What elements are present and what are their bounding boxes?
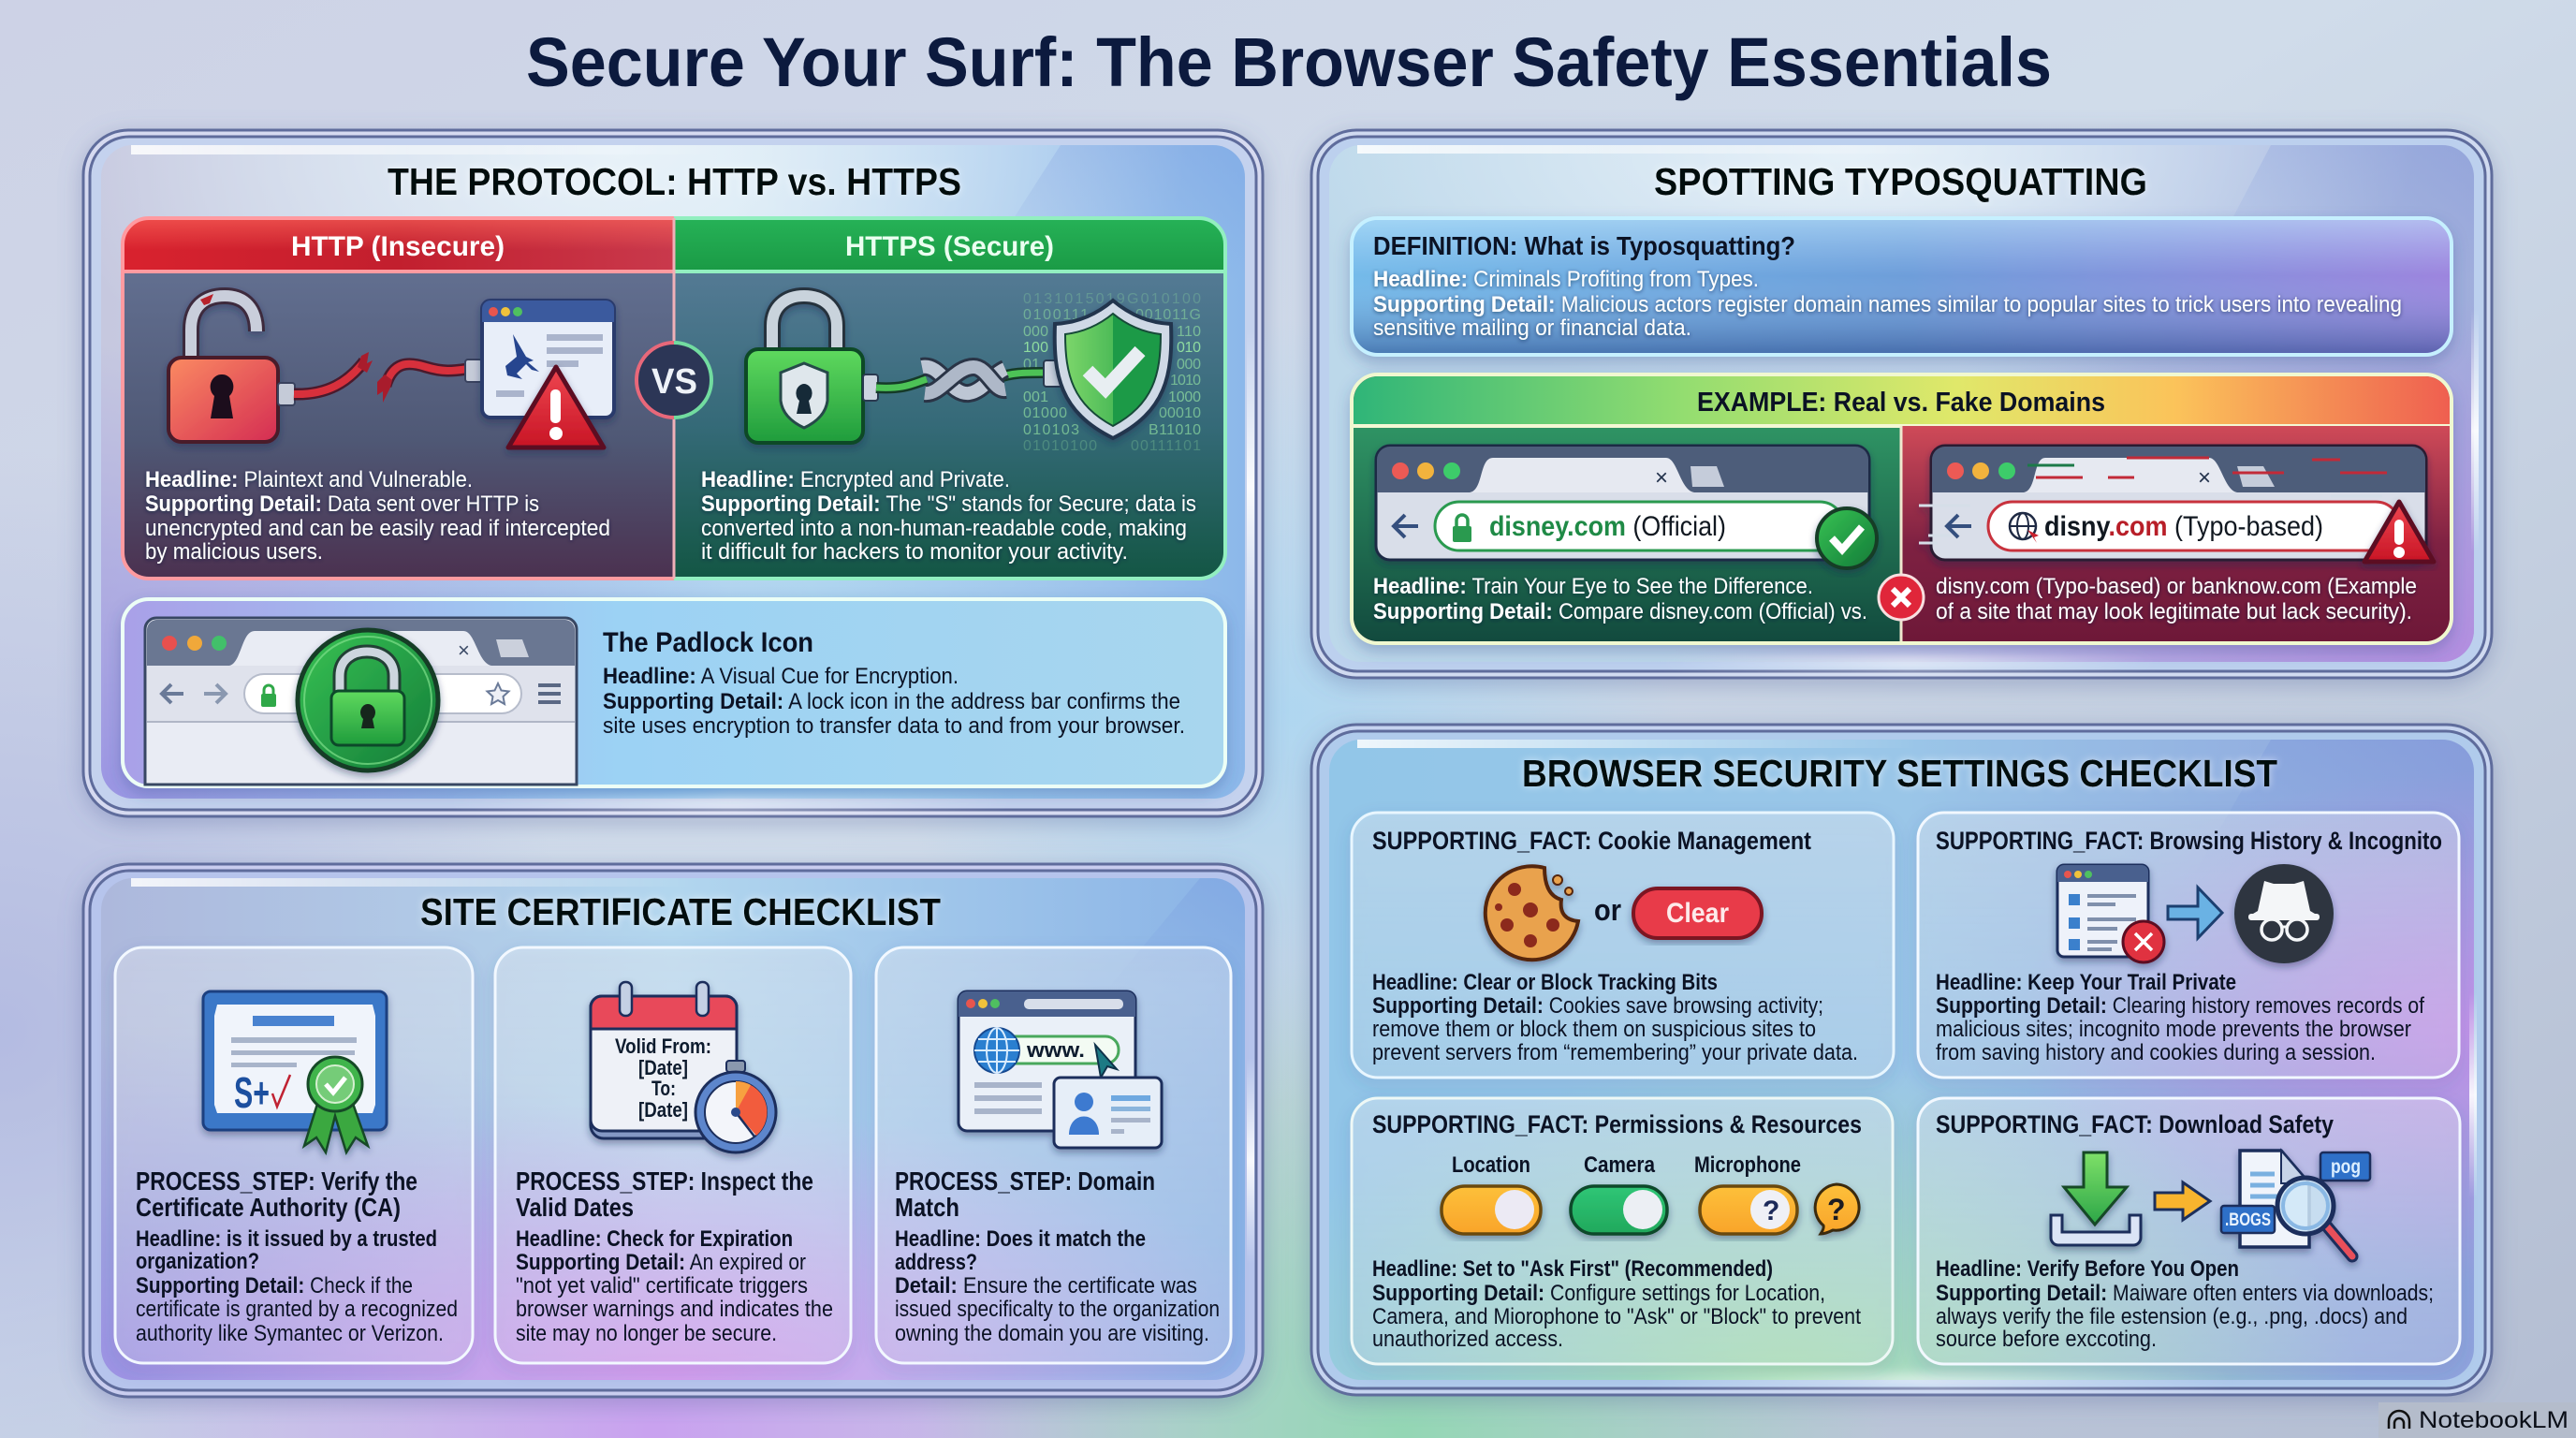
browser mockup with padlock: × [458,638,470,662]
download text: Supporting Detail: Maiware often enters via downloads; [1936,1281,2434,1306]
history text: Headline: Keep Your Trail Private [1936,970,2236,995]
definition text: Headline: Criminals Profiting from Types. [1373,267,1759,292]
binary digits backdrop: 00010 [1159,405,1201,421]
padlock text: The Padlock Icon [603,627,813,658]
binary digits backdrop: 01 [1023,357,1040,373]
clear button: Clear [1666,898,1729,929]
permissions text: Headline: Set to "Ask First" (Recommended) [1372,1256,1773,1282]
official text [1373,574,1867,624]
permissions text: Camera, and Miorophone to "Ask" or "Block" to prevent [1372,1304,1861,1329]
card: domain match [876,947,1231,1363]
icon: file inspection [2221,1151,2370,1256]
card: cookie management [1352,813,1894,1078]
icon: question bubble [1815,1184,1859,1234]
icon: green padlock [746,296,863,443]
browser mockup with padlock [145,618,577,785]
card: verify certificate authority [115,947,473,1363]
example heading: EXAMPLE: Real vs. Fake Domains [1697,388,2105,418]
icon: calendar with stopwatch: To: [651,1077,676,1100]
padlock text: site uses encryption to transfer data to and from your browser. [603,713,1185,739]
cookie heading: SUPPORTING_FACT: Cookie Management [1372,827,1811,855]
cookie text [1372,970,1858,1065]
panel frame [83,130,1263,816]
icon: bitten cookie [1486,866,1578,960]
https body text: Headline: Encrypted and Private. [701,467,1010,492]
toggle labels: Camera [1584,1152,1656,1178]
toggle: microphone [1700,1186,1797,1234]
fake side [1901,426,2450,641]
binary digits backdrop: 0131015019G010100 [1023,291,1201,307]
domain text: address? [895,1250,977,1275]
toggle: camera [1571,1186,1667,1234]
binary digits backdrop: 010103 [1023,422,1079,438]
toggle: location [1442,1186,1541,1234]
toggle labels: Location [1452,1152,1530,1178]
icon: red x badge [1879,575,1924,620]
certificate text: Supporting Detail: Check if the [136,1273,413,1299]
icon: certificate with ribbon [203,991,387,1152]
panel: site certificate checklist [83,864,1263,1397]
example card [1352,374,2452,643]
http header label: HTTP (Insecure) [291,231,505,262]
dates text: PROCESS_STEP: Inspect the [516,1167,813,1196]
icon: calendar with stopwatch: [Date] [638,1098,688,1122]
icon: calendar with stopwatch [591,982,776,1152]
dates text: browser warnings and indicates the [516,1297,833,1322]
card: download safety [1918,1098,2460,1364]
domain text: owning the domain you are visiting. [895,1321,1209,1346]
download text: source before exccoting. [1936,1327,2157,1352]
history text: malicious sites; incognito mode prevents the browser [1936,1017,2411,1042]
vs badge [637,343,711,418]
icon: green shield with check [1055,301,1171,438]
binary digits backdrop: B11010 [1149,422,1201,438]
dates text [516,1167,833,1346]
fake text [1936,574,2417,624]
heading: THE PROTOCOL: HTTP vs. HTTPS [388,160,961,203]
icon: yellow arrow [2155,1182,2210,1220]
clear button [1633,888,1762,938]
icon: green check badge [1817,508,1877,568]
icon: broken red cable [278,352,482,405]
panel frame [1311,725,2492,1395]
domain text [895,1167,1220,1346]
toggle labels [1452,1152,1801,1178]
domain text: Headline: Does it match the [895,1226,1146,1252]
panel frame [83,864,1263,1397]
panel: spotting typosquatting [1311,130,2492,678]
definition heading: DEFINITION: What is Typosquatting? [1373,231,1795,260]
official side [1354,376,2450,641]
icon: warning triangle [2364,502,2434,562]
binary digits backdrop: 1000 [1168,389,1201,405]
official address text: disney.com (Official) [1489,511,1726,542]
icon: open red padlock [168,294,278,442]
fake address text: disny.com (Typo-based) [2044,511,2323,542]
domain text: issued specificalty to the organization [895,1297,1220,1322]
card: permissions and resources [1352,1098,1893,1364]
card: the padlock icon [123,599,1225,786]
binary digits backdrop: 1010 [1170,373,1201,389]
permissions text: unauthorized access. [1372,1327,1563,1352]
domain text: Match [895,1193,959,1222]
permissions heading: SUPPORTING_FACT: Permissions & Resources [1372,1110,1862,1138]
definition text: Supporting Detail: Malicious actors register domain names similar to popular sites to trick users into revealing [1373,292,2402,317]
http column [123,218,674,579]
vs badge: VS [651,362,697,402]
fake text: of a site that may look legitimate but lack security). [1936,599,2412,624]
domain text: PROCESS_STEP: Domain [895,1167,1155,1196]
heading: SPOTTING TYPOSQUATTING [1654,160,2147,203]
watermark: notebooklm [2378,1402,2576,1438]
binary digits backdrop: 01000 [1023,405,1067,421]
definition card [1352,218,2452,355]
panel: browser security settings checklist [1311,725,2492,1395]
icon: secured twisted cable [863,360,1062,401]
icon: calendar with stopwatch: Volid From: [615,1034,711,1058]
binary digits backdrop: 110 [1177,324,1201,340]
permissions text [1372,1256,1861,1352]
dates text: Supporting Detail: An expired or [516,1250,806,1275]
https body text: it difficult for hackers to monitor your activity. [701,539,1128,565]
http body text [145,467,610,565]
title: Secure Your Surf: The Browser Safety Essentials [526,23,2052,101]
cookie text: Headline: Clear or Block Tracking Bits [1372,970,1718,995]
certificate text: certificate is granted by a recognized [136,1297,458,1322]
toggle labels: Microphone [1694,1152,1801,1178]
https body text [701,467,1196,565]
or label: or [1594,893,1621,927]
download heading: SUPPORTING_FACT: Download Safety [1936,1110,2334,1138]
history heading: SUPPORTING_FACT: Browsing History & Incognito [1936,827,2442,855]
icon: green padlock orb [298,630,438,770]
fake browser mockup [1919,446,2426,560]
panel frame [1311,130,2492,678]
watermark: notebooklm: NotebookLM [2419,1407,2569,1433]
official text: Supporting Detail: Compare disney.com (Official) vs. [1373,599,1867,624]
binary digits backdrop: 000 [1023,324,1048,340]
domain text: Detail: Ensure the certificate was [895,1273,1197,1299]
dates text: Valid Dates [516,1193,634,1222]
http body text: by malicious users. [145,539,323,565]
binary digits backdrop: 100 [1023,340,1048,356]
certificate text: PROCESS_STEP: Verify the [136,1167,417,1196]
icon: browser with globe and id card [959,991,1162,1148]
binary digits backdrop: 000 [1177,357,1201,373]
card: browsing history and incognito [1918,813,2459,1078]
http body text: unencrypted and can be easily read if intercepted [145,516,610,541]
certificate text [136,1167,458,1346]
binary digits backdrop: 0100111 [1023,307,1089,323]
binary digits backdrop: 001011G [1135,307,1201,323]
toggle: microphone: ? [1763,1196,1779,1226]
definition text [1373,267,2402,341]
history text: from saving history and cookies during a session. [1936,1040,2376,1065]
history text: Supporting Detail: Clearing history removes records of [1936,993,2424,1019]
icon: download arrow and tray [2051,1152,2141,1245]
history text [1936,970,2424,1065]
cookie text: remove them or block them on suspicious sites to [1372,1017,1816,1042]
cookie text: Supporting Detail: Cookies save browsing activity; [1372,993,1823,1019]
binary digits backdrop [1023,291,1201,454]
https header label: HTTPS (Secure) [845,231,1054,262]
certificate text: authority like Symantec or Verizon. [136,1321,444,1346]
http body text: Headline: Plaintext and Vulnerable. [145,467,473,492]
padlock text: Headline: A Visual Cue for Encryption. [603,664,959,689]
definition text: sensitive mailing or financial data. [1373,315,1691,341]
official browser mockup: × [1655,465,1668,491]
official browser mockup [1376,446,1869,560]
binary digits backdrop: 001 [1023,389,1048,405]
icon: file inspection: pog [2331,1156,2361,1178]
dates text: site may no longer be secure. [516,1321,777,1346]
binary digits backdrop: 010 [1177,340,1201,356]
heading: SITE CERTIFICATE CHECKLIST [420,890,941,933]
fake text: disny.com (Typo-based) or banknow.com (Example [1936,574,2417,599]
dates text: "not yet valid" certificate triggers [516,1273,808,1299]
https column [674,218,1225,579]
icon: certificate with ribbon: S+ [234,1068,270,1117]
icon: compromised browser window [482,301,614,418]
card: inspect valid dates [495,947,851,1363]
icon: right arrow [2168,888,2222,938]
dates text: Headline: Check for Expiration [516,1226,793,1252]
icon: browser with globe and id card: www. [1026,1038,1085,1062]
http body text: Supporting Detail: Data sent over HTTP is [145,492,539,517]
download text [1936,1256,2434,1352]
certificate text: organization? [136,1249,259,1274]
icon: question bubble: ? [1827,1193,1846,1226]
cookie text: prevent servers from “remembering” your private data. [1372,1040,1858,1065]
panel: the protocol http vs https [83,130,1263,816]
https body text: Supporting Detail: The "S" stands for Secure; data is [701,492,1196,517]
icon: history list with delete badge [2057,865,2164,962]
https body text: converted into a non-human-readable code, making [701,516,1187,541]
download text: Headline: Verify Before You Open [1936,1256,2239,1282]
binary digits backdrop: 01010100 [1023,438,1097,454]
padlock text [603,627,1185,739]
icon: warning triangle [508,367,604,448]
icon: incognito badge [2234,864,2334,963]
heading: BROWSER SECURITY SETTINGS CHECKLIST [1522,752,2277,795]
icon: file inspection: .BOGS [2225,1211,2271,1230]
padlock text: Supporting Detail: A lock icon in the address bar confirms the [603,689,1180,714]
fake browser mockup: × [2198,465,2211,491]
download text: always verify the file estension (e.g., .png, .docs) and [1936,1304,2408,1329]
permissions text: Supporting Detail: Configure settings for Location, [1372,1281,1825,1306]
certificate text: Headline: is it issued by a trusted [136,1226,437,1252]
icon: calendar with stopwatch: [Date] [638,1056,688,1079]
binary digits backdrop: 00111101 [1131,438,1201,454]
comparison table [123,218,1225,579]
official text: Headline: Train Your Eye to See the Difference. [1373,574,1813,599]
certificate text: Certificate Authority (CA) [136,1193,401,1222]
